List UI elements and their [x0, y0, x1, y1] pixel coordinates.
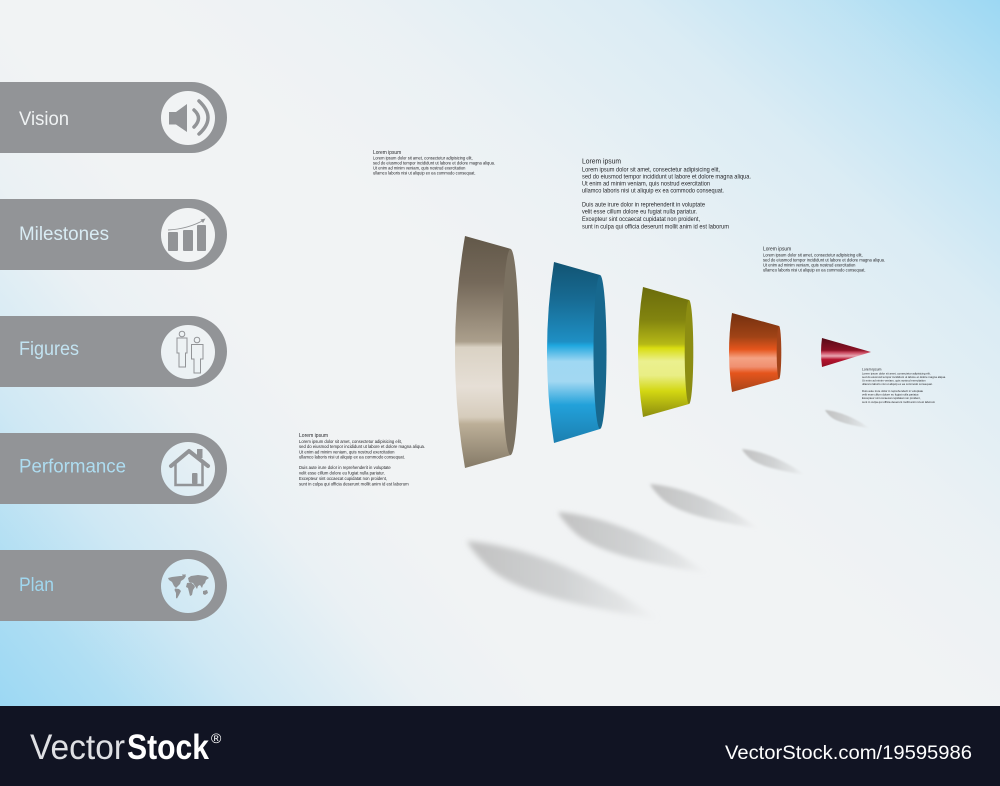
panel: Milestones	[0, 199, 227, 270]
segment: yellow cylinder	[638, 287, 693, 417]
text block: top centre: sed do eiusmod tempor incididunt ut labore et dolore magna aliqua.	[582, 174, 751, 180]
label: Milestones: Milestones	[19, 224, 109, 245]
text block: upper right: Lorem ipsum	[763, 246, 792, 253]
segment: orange cylinder	[729, 313, 781, 392]
text block: beside red cone: Duis aute irure dolor in reprehenderit in voluptate	[862, 389, 923, 393]
label: Plan: Plan	[19, 575, 54, 596]
text block: upper right: Ut enim ad minim veniam, quis nostrud exercitation	[763, 262, 856, 267]
text block: upper right	[763, 246, 885, 272]
label: Vision: Vision	[19, 109, 69, 130]
segment: blue cylinder	[547, 262, 606, 443]
text block: top centre: Lorem ipsum	[582, 156, 621, 166]
text block: top centre: velit esse cillum dolore eu fugiat nulla pariatur.	[582, 208, 697, 216]
logo: VectorStock: Vector	[30, 728, 125, 767]
url text: VectorStock.com/19595986	[725, 742, 972, 764]
segment: brown cylinder	[455, 236, 519, 468]
text block: lower left: Excepteur sint occaecat cupidatat non proident,	[299, 476, 387, 481]
icon: house	[171, 449, 208, 485]
text block: top centre: Lorem ipsum dolor sit amet, consectetur adipisicing elit,	[582, 166, 720, 174]
text block: top left: ullamco laboris nisi ut aliquip ex ea commodo consequat.	[373, 171, 476, 176]
footer bar	[0, 706, 1000, 786]
text block: beside red cone: velit esse cillum dolore eu fugiat nulla pariatur.	[862, 392, 919, 396]
logo: VectorStock: ®	[211, 730, 222, 746]
icon: two people	[177, 331, 203, 373]
text block: beside red cone: Ut enim ad minim veniam, quis nostrud exercitation	[862, 378, 926, 382]
text block: top centre: ullamco laboris nisi ut aliquip ex ea commodo consequat.	[582, 188, 724, 194]
text block: lower left: Lorem ipsum	[299, 433, 328, 439]
text block: top left: Lorem ipsum	[373, 150, 402, 156]
text block: top centre: sunt in culpa qui officia deserunt mollit anim id est laborum	[582, 224, 729, 230]
text block: top left: sed do eiusmod tempor incididunt ut labore et dolore magna aliqua.	[373, 161, 495, 166]
text block: top left	[373, 150, 495, 176]
panel: Performance	[0, 433, 227, 504]
text block: lower left: ullamco laboris nisi ut aliquip ex ea commodo consequat.	[299, 455, 405, 460]
logo: VectorStock	[30, 728, 222, 767]
text block: beside red cone: sed do eiusmod tempor incididunt ut labore et dolore magna aliqua.	[862, 375, 946, 379]
text block: lower left: sed do eiusmod tempor incididunt ut labore et dolore magna aliqua.	[299, 444, 425, 449]
icon: world map	[168, 574, 209, 598]
text block: top centre: Duis aute irure dolor in reprehenderit in voluptate	[582, 202, 705, 208]
text block: top centre	[582, 156, 751, 230]
text block: top centre: Excepteur sint occaecat cupidatat non proident,	[582, 216, 700, 223]
text block: top centre: Ut enim ad minim veniam, quis nostrud exercitation	[582, 180, 710, 188]
panel: Vision	[0, 82, 227, 153]
logo: VectorStock: Stock	[127, 728, 209, 767]
text block: beside red cone: sunt in culpa qui officia deserunt mollit anim id est laborum	[862, 400, 935, 404]
text block: lower left: sunt in culpa qui officia deserunt mollit anim id est laborum	[299, 481, 409, 486]
segment: red cone	[821, 338, 871, 367]
text block: lower left: Duis aute irure dolor in reprehenderit in voluptate	[299, 465, 391, 470]
text block: lower left: velit esse cillum dolore eu fugiat nulla pariatur.	[299, 470, 385, 475]
icon: speaker	[169, 101, 208, 134]
text block: beside red cone: ullamco laboris nisi ut aliquip ex ea commodo consequat.	[862, 382, 933, 386]
text block: beside red cone: Lorem ipsum	[862, 368, 881, 372]
text block: top left: Lorem ipsum dolor sit amet, consectetur adipisicing elit,	[373, 156, 473, 161]
icon: rising bars	[168, 218, 206, 251]
text block: beside red cone: Excepteur sint occaecat cupidatat non proident,	[862, 396, 921, 400]
panel: Figures	[0, 316, 227, 387]
text block: upper right: sed do eiusmod tempor incididunt ut labore et dolore magna aliqua.	[763, 257, 885, 262]
text block: upper right: Lorem ipsum dolor sit amet, consectetur adipisicing elit,	[763, 252, 863, 257]
shadows under segments	[467, 410, 870, 620]
text block: beside red cone: Lorem ipsum dolor sit amet, consectetur adipisicing elit,	[862, 371, 931, 375]
label: Performance: Performance	[19, 456, 126, 478]
text block: lower left: Lorem ipsum dolor sit amet, consectetur adipisicing elit,	[299, 439, 402, 444]
text block: top left: Ut enim ad minim veniam, quis nostrud exercitation	[373, 166, 466, 171]
panel: Plan	[0, 550, 227, 621]
text block: lower left: Ut enim ad minim veniam, quis nostrud exercitation	[299, 449, 395, 454]
text block: beside red cone	[862, 368, 946, 404]
text block: upper right: ullamco laboris nisi ut aliquip ex ea commodo consequat.	[763, 267, 866, 272]
text block: lower left	[299, 433, 425, 486]
label: Figures: Figures	[19, 339, 79, 360]
